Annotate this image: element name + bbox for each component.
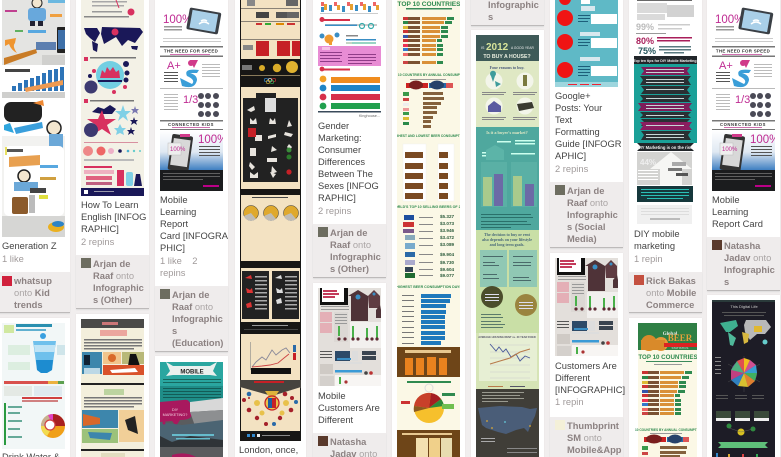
pin: Mobile Learning Report Card xyxy=(155,0,228,351)
avatar xyxy=(555,420,565,430)
thumbnail: mobile learning report card: 1/3 xyxy=(183,94,198,106)
footer: attribution xyxy=(155,286,228,352)
pin: beer consumption statistics xyxy=(392,0,465,457)
thumbnail: gender marketing infographic: Kinghouse... xyxy=(359,114,380,118)
thumbnail: mobile learning report card xyxy=(712,8,775,191)
thumbnail: mobile learning report card: 100% xyxy=(163,14,192,26)
footer: attribution xyxy=(313,224,386,278)
thumbnail: DIY mobile marketing infographic: Top ten tips for DIY Mobile Marketing xyxy=(634,59,697,63)
pin: Drink Water xyxy=(0,318,70,457)
attribution text: whatsup onto Kid trends xyxy=(14,276,52,310)
thumbnail: mobile DIY marketing: MOBILE xyxy=(180,370,204,376)
thumbnail: buying a house infographic: Four reasons to buy. xyxy=(490,65,524,70)
thumbnail: global beer consumption statistics xyxy=(634,323,697,457)
repin count: 1 repin xyxy=(555,397,584,407)
thumbnail: beer consumption infographic: $9.077 xyxy=(440,273,454,278)
title: Customers Are Different [INFOGRAPHIC] xyxy=(555,361,625,395)
title: Mobile Learning Report Card [INFOGRA PHIC] xyxy=(160,195,228,253)
avatar xyxy=(555,185,565,195)
thumbnail: DIY mobile marketing infographic: 99% xyxy=(636,22,654,32)
thumbnail: buying a house infographic: IS xyxy=(481,46,485,50)
thumbnail: mobile learning report card: 100% xyxy=(722,147,738,153)
footer: attribution xyxy=(76,255,149,309)
pin: DIY marketing mobile xyxy=(155,356,228,457)
like and repin count: 1 like 2 repins xyxy=(160,256,197,278)
avatar xyxy=(2,276,12,286)
attribution text: Arjan de Raaf onto Infographic s (Other) xyxy=(93,259,144,305)
thumbnail: London Olympics infographic xyxy=(240,0,301,441)
repin count: 2 repins xyxy=(555,164,588,174)
thumbnail: DIY mobile marketing infographic xyxy=(634,0,697,224)
thumbnail: beer consumption infographic: $3.472 xyxy=(440,235,454,240)
pin: Gender Marketing xyxy=(313,0,386,277)
title: Generation Z xyxy=(2,241,57,251)
pin: Google+ Posts Text Formatting Guide xyxy=(550,0,623,247)
thumbnail: beer consumption infographic: $5.327 xyxy=(440,214,454,219)
footer: attribution xyxy=(0,272,70,313)
thumbnail: global beer consumption statistics: Global xyxy=(663,332,678,337)
footer: attribution xyxy=(629,272,702,313)
pin: London Olympics xyxy=(235,0,306,457)
thumbnail: DIY mobile marketing infographic: DIY Marketing is on the rise xyxy=(638,145,693,150)
pin: Is 2012 a good year to buy a house xyxy=(471,30,544,457)
thumbnail: global beer consumption statistics: BEER xyxy=(668,333,693,343)
pin: Customers Are Different xyxy=(550,253,623,457)
thumbnail: learn English infographic xyxy=(81,0,144,196)
title: DIY mobile marketing xyxy=(634,229,680,251)
footer: attribution xyxy=(550,417,623,457)
thumbnail: mobile learning report card: 100% xyxy=(715,14,744,26)
repin count: 1 repin xyxy=(634,254,663,264)
attribution text: Natasha Jadav onto Infographic s xyxy=(724,241,775,287)
thumbnail: buying a house infographic: AVERAGE HOUSING RENT vs. 30 YEAR FIXED xyxy=(478,335,536,339)
thumbnail: mobile learning report card: 100% xyxy=(170,147,186,153)
thumbnail: DIY mobile marketing infographic: 75% xyxy=(638,46,656,56)
pin: DIY mobile marketing xyxy=(629,0,702,312)
title: Gender Marketing: Consumer Differences Between The Sexes [INFOG RAPHIC] xyxy=(318,121,379,203)
avatar xyxy=(81,258,91,268)
thumbnail: customers infographic xyxy=(555,258,618,356)
thumbnail: mobile learning report card: CONNECTED KIDS xyxy=(168,122,214,127)
thumbnail: beer consumption infographic: $3.089 xyxy=(440,242,454,247)
footer: attribution xyxy=(313,433,386,457)
thumbnail: endangered animals infographic xyxy=(81,319,144,457)
thumbnail: beer consumption infographic: $9.904 xyxy=(440,252,454,257)
thumbnail: beer consumption infographic xyxy=(397,0,460,457)
thumbnail: gender marketing infographic xyxy=(318,2,381,118)
thumbnail: Generation Z infographic xyxy=(2,0,65,237)
thumbnail: text formatting guide xyxy=(555,0,618,87)
thumbnail: mobile DIY marketing: MARKETING? xyxy=(163,413,187,417)
attribution text: Rick Bakas onto Mobile Commerce xyxy=(646,276,696,310)
title: How To Learn English [INFOG RAPHIC] xyxy=(81,200,146,234)
avatar xyxy=(318,227,328,237)
avatar xyxy=(160,289,170,299)
repin count: 2 repins xyxy=(318,206,351,216)
thumbnail: DIY mobile marketing infographic: 44% xyxy=(640,158,656,167)
title: London, once, xyxy=(239,445,298,455)
thumbnail: buying a house infographic: A GOOD YEAR xyxy=(511,46,534,50)
thumbnail: digital life infographic xyxy=(712,300,775,457)
thumbnail: beer consumption infographic: $3.073 xyxy=(440,221,454,226)
thumbnail: mobile customers infographic xyxy=(318,288,381,386)
avatar xyxy=(712,240,722,250)
thumbnail: DIY mobile marketing infographic: 80% xyxy=(636,36,654,46)
thumbnail: beer consumption infographic: $9.730 xyxy=(440,260,454,265)
thumbnail: mobile DIY marketing xyxy=(160,362,223,457)
thumbnail: buying a house infographic: The decision to buy or rent xyxy=(484,232,531,237)
pin: This Digital Life xyxy=(707,295,780,457)
thumbnail: mobile learning report card xyxy=(160,8,223,191)
thumbnail: buying a house infographic: and long term goals. xyxy=(490,242,524,247)
pin: Mobile Learning Report Card (repeat) xyxy=(707,0,780,290)
title: Google+ Posts: Your Text Formatting Guide [INFOGR APHIC] xyxy=(555,91,621,161)
pin: Global beer consumption xyxy=(629,318,702,457)
attribution text: Arjan de Raaf onto Infographic s (Other) xyxy=(330,228,381,274)
thumbnail: mobile learning report card: 1/3 xyxy=(735,94,750,106)
attribution text: Thumbprint SM onto Mobile&App xyxy=(567,421,622,455)
thumbnail: mobile learning report card: CONNECTED KIDS xyxy=(720,122,766,127)
attribution text: Arjan de Raaf onto Infographic s (Education) xyxy=(172,290,223,348)
avatar xyxy=(634,275,644,285)
pin: endangered animals xyxy=(76,314,149,457)
footer: attribution xyxy=(550,182,623,248)
thumbnail: mobile learning report card: A+ xyxy=(167,60,181,72)
thumbnail: buying a house infographic: Is it a buyer's market? xyxy=(486,130,528,135)
thumbnail: buying a house infographic: TO BUY A HOUSE? xyxy=(483,54,531,60)
pin: How To Learn English xyxy=(76,0,149,308)
pin: Generation Z xyxy=(0,0,70,312)
thumbnail: digital life infographic: This Digital Life xyxy=(730,304,758,309)
repin count: 2 repins xyxy=(81,237,114,247)
thumbnail: buying a house infographic: 2012 xyxy=(486,42,509,53)
thumbnail: buying a house infographic: also depends on your lifestyle xyxy=(482,237,532,242)
thumbnail: global beer consumption statistics: STATISTICS xyxy=(672,346,688,350)
attribution text: Arjan de Raaf onto Infographic s (Social Media) xyxy=(567,186,618,244)
thumbnail: beer consumption infographic: $3.946 xyxy=(440,228,454,233)
thumbnail: global beer consumption statistics: TOP 10 COUNTRIES xyxy=(638,354,697,361)
likes: 1 like xyxy=(2,254,24,264)
thumbnail: beer consumption infographic: TOP 10 COUNTRIES xyxy=(397,1,460,8)
thumbnail: drinking water and sanitation xyxy=(2,323,65,449)
thumbnail: beer consumption infographic: $9.604 xyxy=(440,267,454,272)
footer: attribution xyxy=(707,237,780,291)
thumbnail: mobile learning report card: A+ xyxy=(719,60,733,72)
thumbnail: buying a house infographic xyxy=(476,35,539,457)
thumbnail: mobile learning report card: THE NEED FOR SPEED xyxy=(164,48,218,54)
pin: Infographic footer, col 7 top xyxy=(471,0,544,26)
footer: attribution xyxy=(471,0,544,26)
thumbnail: mobile learning report card: THE NEED FOR SPEED xyxy=(716,48,770,54)
title: Mobile Customers Are Different xyxy=(318,391,380,425)
thumbnail: mobile DIY marketing: DIY xyxy=(172,408,179,412)
avatar xyxy=(318,436,328,446)
attribution text: Infographic s xyxy=(488,0,539,22)
title: Mobile Learning Report Card xyxy=(712,195,763,229)
pin: Mobile Customers Are Different xyxy=(313,283,386,457)
